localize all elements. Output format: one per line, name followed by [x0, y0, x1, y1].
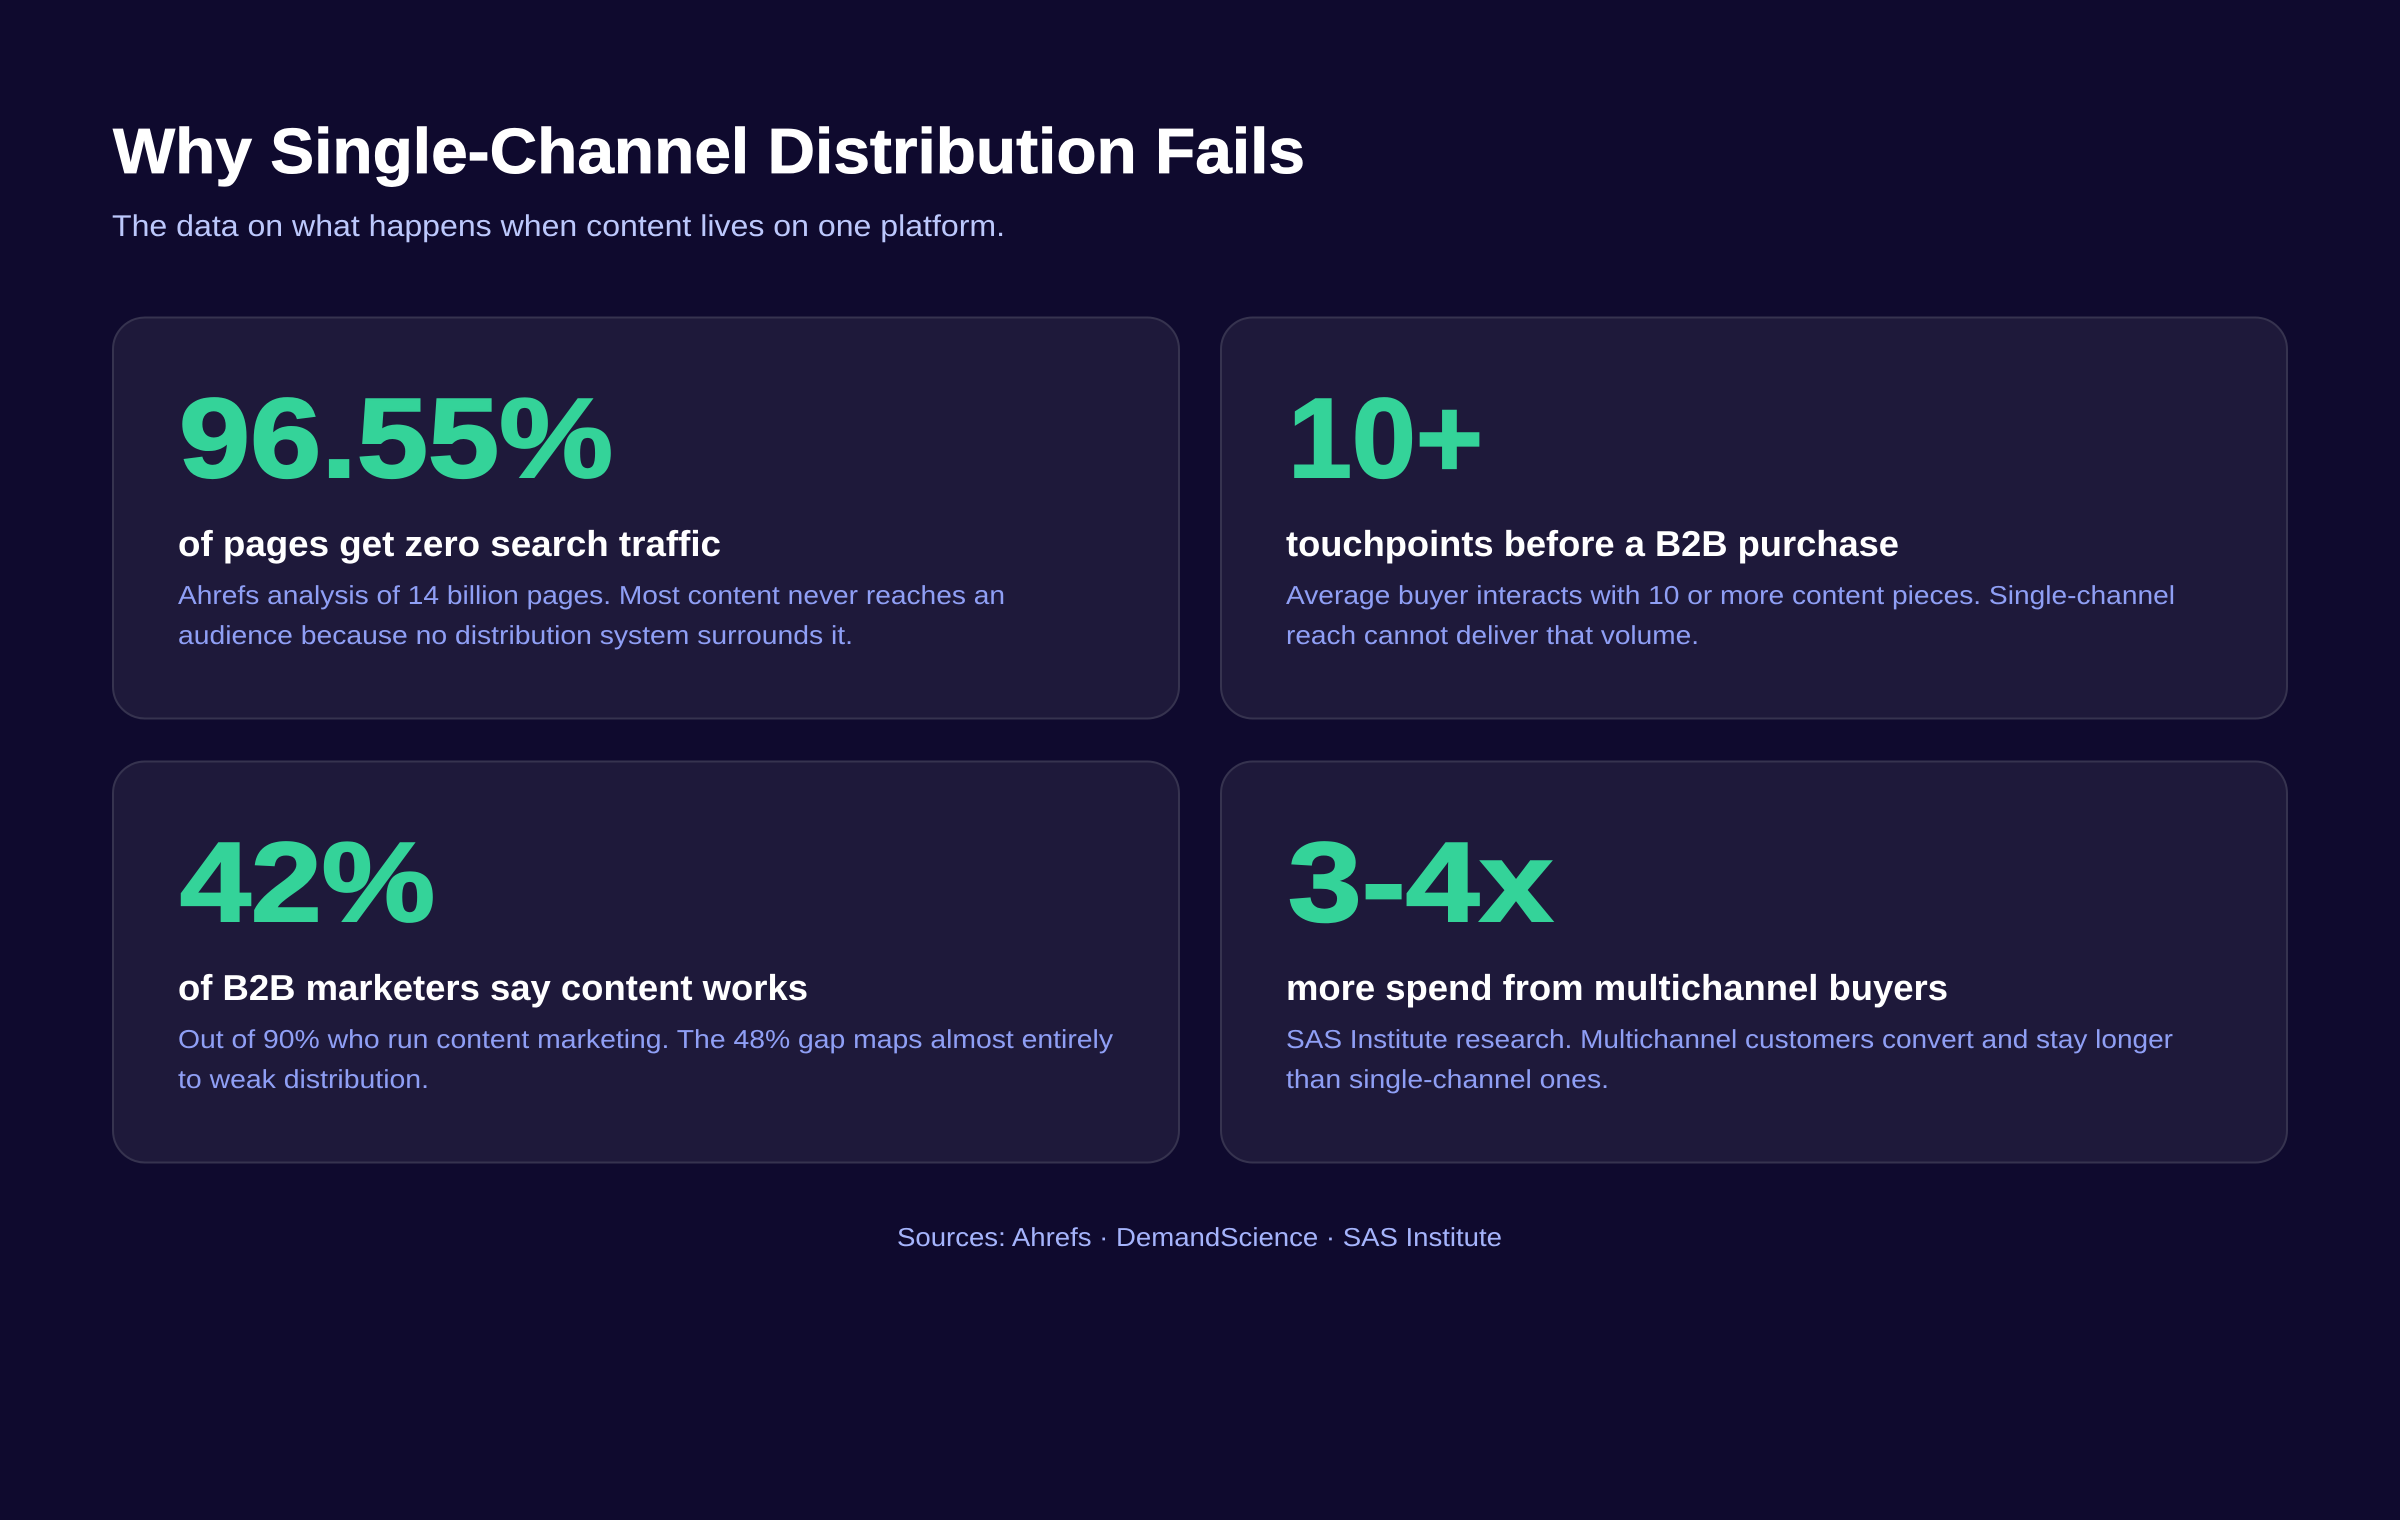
description: SAS Institute: than single-channel ones.: [1286, 1064, 1609, 1094]
title: Why Single-Channel Distribution Fails: [113, 115, 1305, 187]
description: SAS Institute: SAS Institute research. Multichannel customers convert and stay longer: [1286, 1024, 2173, 1054]
panel: 96.55% stat card: [113, 318, 1179, 718]
description: out of 90%: [178, 1024, 1113, 1094]
sources footer: Sources: Ahrefs · DemandScience · SAS Institute: [897, 1222, 1502, 1252]
description: Ahrefs analysis: audience because no distribution system surrounds it.: [178, 620, 853, 650]
description: out of 90%: Out of 90% who run content marketing. The 48% gap maps almost entirely: [178, 1024, 1113, 1054]
description: average buyer: Average buyer interacts with 10 or more content pieces. Single-channel: [1286, 580, 2175, 610]
description: average buyer: [1286, 580, 2175, 650]
label: multichannel buyers: more spend from multichannel buyers: [1286, 967, 1948, 1008]
stat: 96.55%: 96.55%: [179, 375, 613, 501]
description: Ahrefs analysis: Ahrefs analysis of 14 billion pages. Most content never reaches an: [178, 580, 1005, 610]
stat: 42%: 42%: [180, 819, 435, 945]
subtitle: The data on what happens when content lives on one platform.: [112, 210, 1005, 243]
stat: 10+: 10+: [1288, 375, 1483, 501]
label: zero search traffic: of pages get zero search traffic: [178, 523, 721, 564]
description: Ahrefs analysis: [178, 580, 1005, 650]
panel: 3-4x stat card: [1221, 762, 2287, 1162]
panel: 10+ stat card: [1221, 318, 2287, 718]
stat: 3-4x: 3-4x: [1288, 819, 1553, 945]
panel: 42% stat card: [113, 762, 1179, 1162]
description: out of 90%: to weak distribution.: [178, 1064, 429, 1094]
description: average buyer: reach cannot deliver that volume.: [1286, 620, 1699, 650]
label: content works: of B2B marketers say content works: [178, 967, 808, 1008]
label: touchpoints: touchpoints before a B2B purchase: [1286, 523, 1899, 564]
description: SAS Institute: [1286, 1024, 2173, 1094]
